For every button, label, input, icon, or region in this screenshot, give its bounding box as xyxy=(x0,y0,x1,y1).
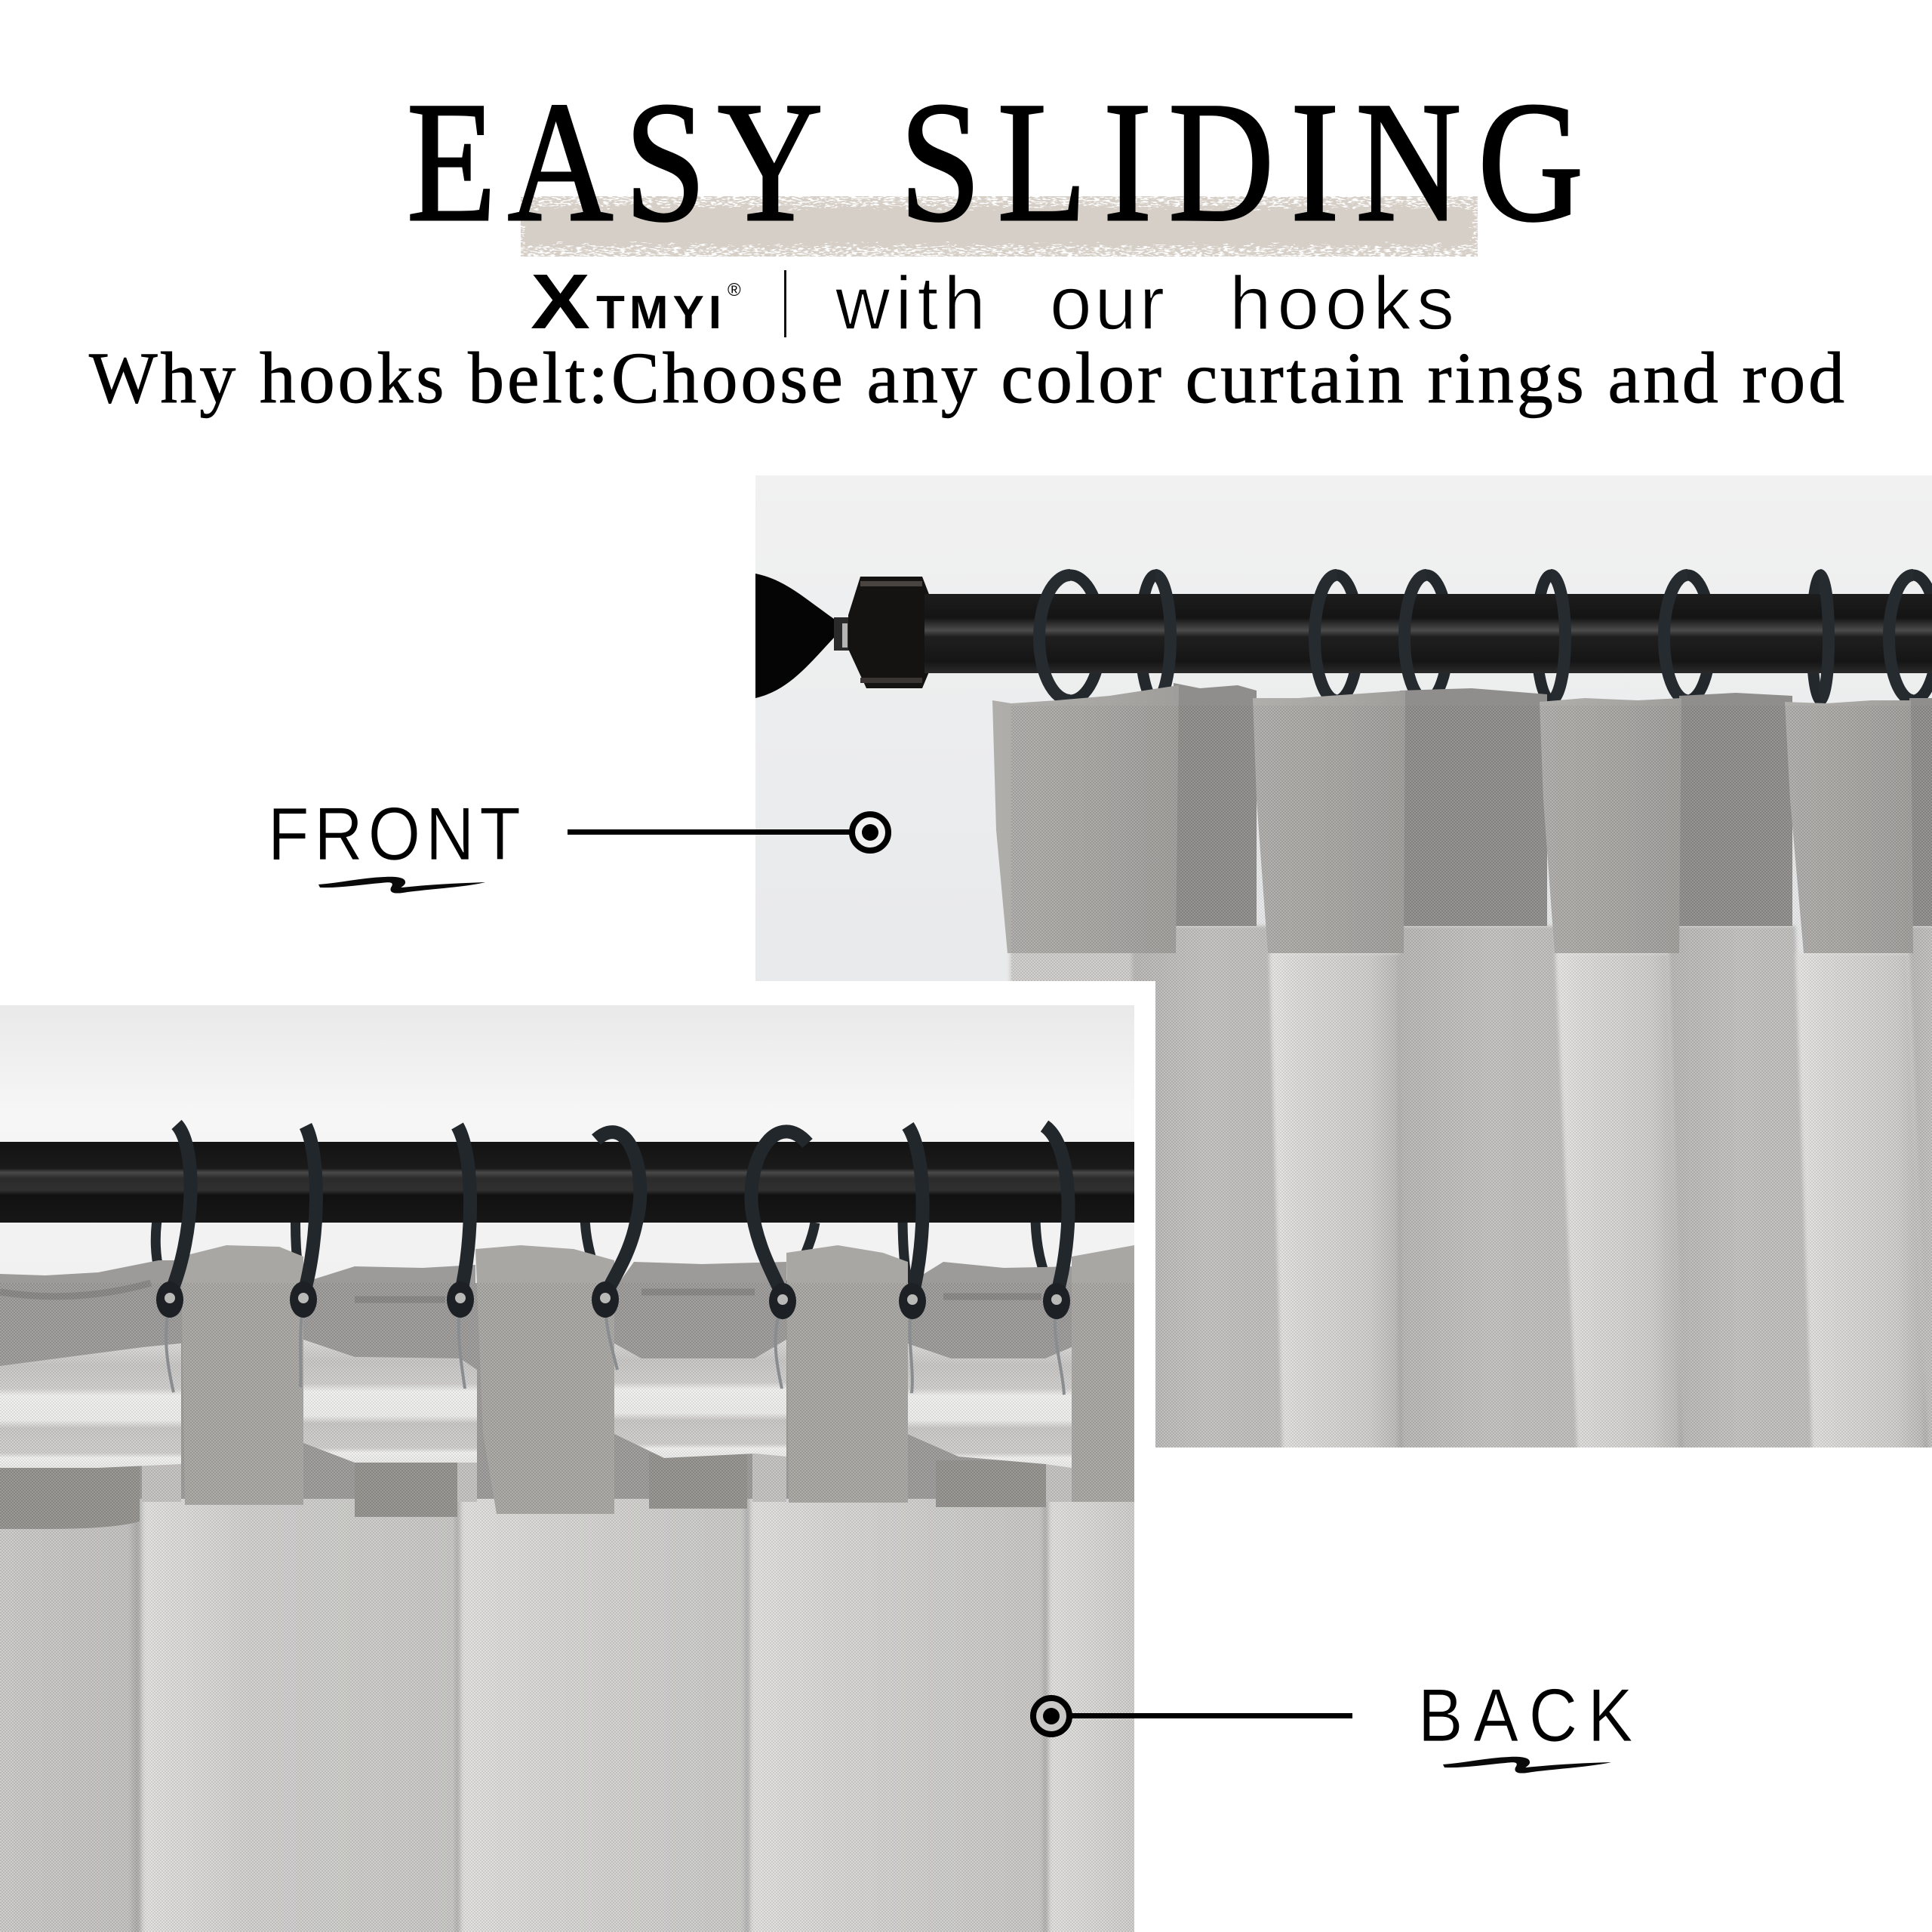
front squiggle underline xyxy=(318,877,485,894)
callout: front xyxy=(268,792,888,894)
subtitle: Why hooks belt:Choose any color curtain rings and rod xyxy=(89,337,1844,418)
rings: rear loops xyxy=(151,1223,1048,1283)
fabric weave texture xyxy=(0,1283,1134,1932)
back target marker xyxy=(1033,1698,1069,1734)
rings: rear arcs xyxy=(1039,575,1932,700)
curtain header: front pleats xyxy=(992,685,1913,953)
curtain lower drape xyxy=(0,1491,1149,1932)
brand logo xyxy=(531,258,741,345)
rear flaps xyxy=(181,1245,1134,1514)
back squiggle underline xyxy=(1443,1757,1611,1774)
brush stroke highlight xyxy=(521,196,1478,257)
rings: front arcs xyxy=(1039,575,1913,700)
ring eyelets xyxy=(156,1281,1070,1319)
hem shadows xyxy=(0,1283,1041,1300)
title xyxy=(407,66,1583,257)
curtain header: back panels xyxy=(1174,683,1932,926)
eyelet holes xyxy=(165,1293,1062,1305)
wall xyxy=(755,475,1932,981)
brand logo: TMYI xyxy=(596,287,721,339)
wall xyxy=(0,1005,1134,1307)
title: SLIDING xyxy=(900,66,1583,257)
front label: FRONT xyxy=(268,792,521,875)
fabric weave texture xyxy=(1011,706,1932,1447)
photo: back of curtain xyxy=(0,1005,1149,1932)
header tape xyxy=(0,1340,1072,1468)
rod finial xyxy=(755,574,930,698)
rings: front arcs xyxy=(170,1124,1069,1295)
curtain upper: back panels xyxy=(0,1260,1134,1499)
back label: BACK xyxy=(1418,1674,1632,1757)
curtain upper: darker bottom bands xyxy=(0,1453,1046,1529)
title: EASY xyxy=(407,66,823,257)
front leader line xyxy=(568,829,851,835)
brand logo: X xyxy=(531,258,590,345)
curtain lower drape xyxy=(1010,926,1932,1464)
hook pins xyxy=(165,1317,1066,1395)
divider xyxy=(784,270,786,337)
back leader line xyxy=(1069,1713,1352,1718)
tagline xyxy=(835,261,1454,346)
brand logo: ® xyxy=(728,280,741,300)
photo: front of curtain xyxy=(755,475,1932,1464)
curtain rod xyxy=(0,1142,1134,1223)
curtain rod xyxy=(924,594,1932,673)
tagline: our xyxy=(1050,261,1164,346)
header xyxy=(89,66,1844,418)
curtain upper: side folds xyxy=(142,1453,1072,1502)
callout: back xyxy=(1033,1674,1632,1774)
tagline: with xyxy=(835,261,986,346)
front target marker xyxy=(852,814,888,851)
tagline: hooks xyxy=(1229,261,1454,346)
